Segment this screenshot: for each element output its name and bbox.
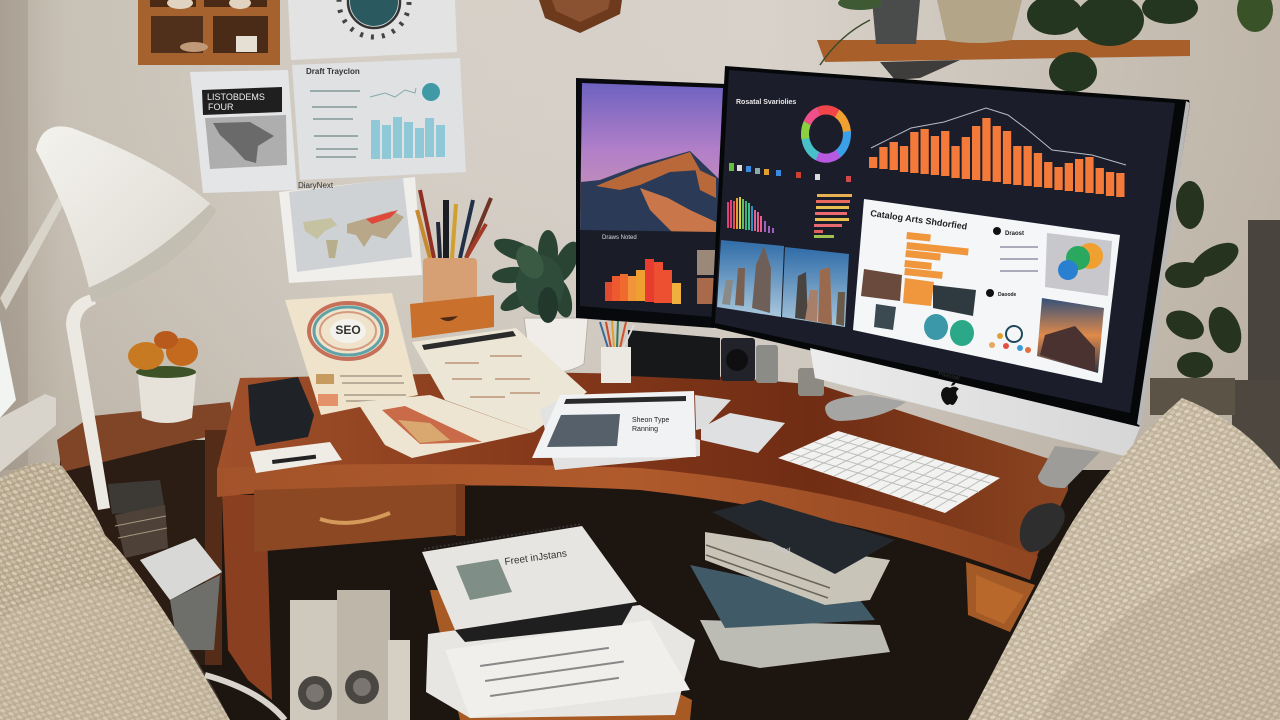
line overlay <box>871 108 1126 165</box>
panel: venn diagram <box>1045 233 1112 296</box>
top right shelf with plants <box>817 0 1273 92</box>
papers under notebook <box>426 590 695 720</box>
business card <box>250 442 342 473</box>
panel: colourful icons <box>989 326 1031 353</box>
white report panel <box>853 199 1120 383</box>
loose papers: Ranning <box>632 426 658 433</box>
black box behind desk items <box>628 330 720 380</box>
SEO poster <box>285 293 418 415</box>
dashboard title: Rosatal Svariolies <box>736 99 796 106</box>
panel: side text: Daoode <box>998 292 1017 298</box>
poster: bar chart report <box>292 58 466 180</box>
loose papers: Sheon Type <box>632 417 669 424</box>
poster: globe <box>288 0 457 60</box>
donut chart <box>799 103 853 165</box>
panel: sunset photo <box>1037 298 1104 373</box>
city photos <box>717 240 849 327</box>
pencil cube <box>600 320 634 383</box>
SEO poster: SEO <box>335 323 361 337</box>
books and papers in side table <box>108 480 222 650</box>
small plant with orange fruits <box>128 331 198 423</box>
cabinet at right <box>1232 220 1280 480</box>
poster: grey map <box>190 70 297 193</box>
black stapler <box>248 377 314 446</box>
desk lamp <box>0 126 217 510</box>
keyboard <box>778 431 1000 513</box>
side table <box>57 402 238 665</box>
window and sill <box>0 320 56 472</box>
poster: bar chart report: Draft Trayclon <box>306 67 360 76</box>
small drawer box <box>410 295 494 338</box>
open report <box>357 328 587 458</box>
horizontal bar chart <box>814 194 852 238</box>
icon row <box>729 163 851 182</box>
poster: grey map: LISTOBDEMS <box>207 92 265 102</box>
poster: framed world map: DiaryNext <box>298 181 334 190</box>
wall shelf with ornaments <box>138 0 280 65</box>
right drawer <box>966 562 1035 632</box>
monitor stand bases <box>825 395 1100 488</box>
white report panel: Catalog Arts Shdorfied <box>870 208 968 232</box>
spiral notebook: Freet inJstans <box>504 548 568 568</box>
rainbow bar chart <box>727 197 774 233</box>
main monitor <box>711 66 1190 428</box>
speakers <box>290 590 410 720</box>
spiral notebook <box>422 524 637 642</box>
desk speaker <box>721 338 755 381</box>
chair blanket right <box>968 398 1280 720</box>
potted plant <box>491 230 588 372</box>
panel: orange bars <box>904 232 969 279</box>
wall <box>0 0 1280 520</box>
steel cup <box>798 368 824 396</box>
panel: side text: Draost <box>1005 231 1024 237</box>
pen holder <box>417 190 491 310</box>
poster: framed world map <box>279 177 422 283</box>
chair blanket left <box>0 462 285 720</box>
monitor chin and logo <box>810 348 1140 457</box>
book stack: Roomed <box>760 541 791 555</box>
desk leg <box>222 495 272 700</box>
back monitor <box>576 78 726 328</box>
book stack <box>690 500 895 668</box>
drawer <box>254 484 465 552</box>
desk top <box>217 372 1068 580</box>
wooden hexagon ornament <box>539 0 622 33</box>
loose papers <box>532 391 785 470</box>
right side hanging plant <box>1150 181 1247 415</box>
back monitor: Draws Noted <box>602 235 637 241</box>
under-desk darkness <box>222 470 1222 720</box>
steel tin <box>756 345 778 383</box>
mouse <box>1020 503 1065 552</box>
orange bar chart <box>869 118 1124 197</box>
monitor chin and logo: Paasaal <box>938 371 960 382</box>
panel: thumbnails <box>861 269 976 346</box>
poster: grey map: FOUR <box>208 102 234 112</box>
panel: side text <box>986 227 1038 298</box>
